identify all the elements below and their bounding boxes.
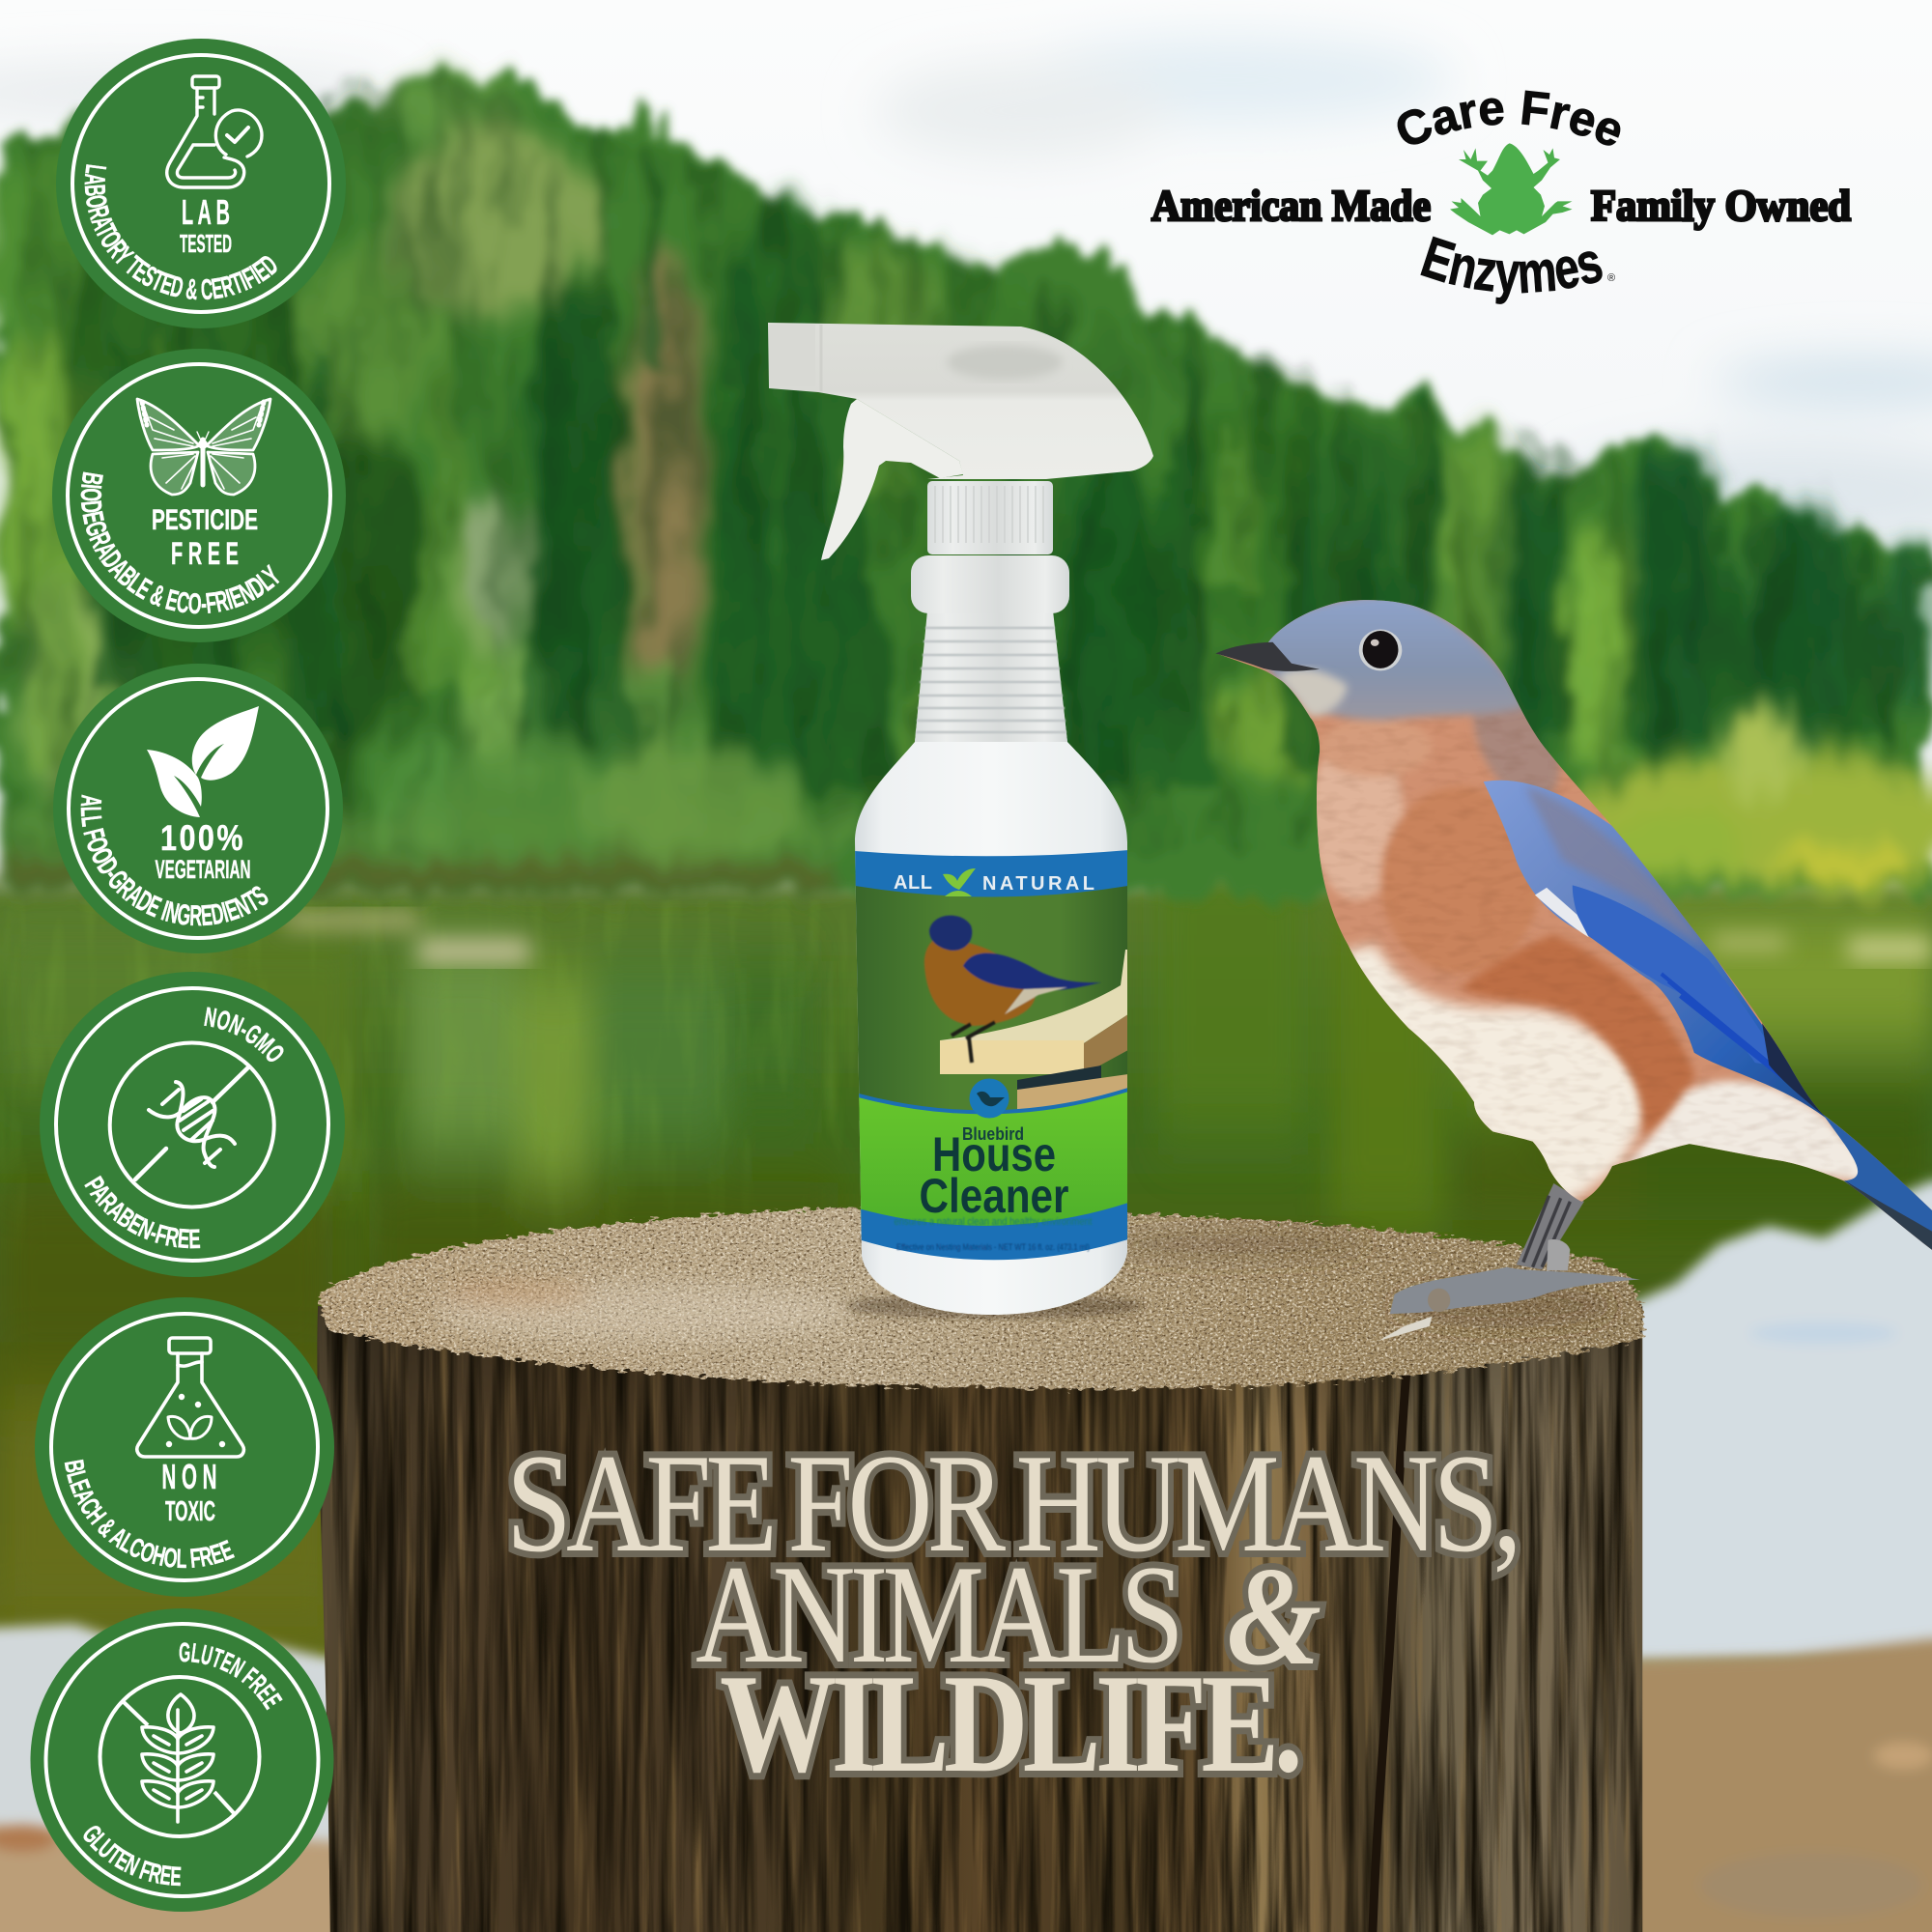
vegetarian text: VEGETARIAN (155, 855, 251, 884)
100% text: 100% (160, 818, 245, 858)
curved text: top: GLUTEN FREE (179, 1637, 288, 1714)
label bluebird photo (924, 916, 1101, 1063)
icon: wheat (142, 1694, 213, 1822)
tail (1823, 1115, 1932, 1269)
neck ribs (916, 628, 1066, 732)
undertail (1619, 1081, 1890, 1186)
curved text: paraben-free: PARABEN-FREE (84, 1175, 201, 1248)
bird body with soft plumage (1198, 580, 1932, 1269)
lake water (0, 838, 1932, 1669)
stump top tonal patches (431, 1227, 1614, 1342)
logo tagline right: Family Owned (1591, 181, 1851, 230)
bright water near shores (0, 1180, 1932, 1861)
label leaf mark (943, 868, 976, 896)
logo tagline left: American Made (1151, 181, 1431, 230)
lab text: L A B (182, 192, 230, 232)
bottom blue band (855, 1203, 1128, 1260)
sky (0, 0, 1932, 690)
curved text: LABORATORY TESTED & CERTIFIED (85, 164, 277, 299)
icon: flask with check (167, 76, 262, 187)
headline ampersand: & (1227, 1538, 1321, 1694)
headline line 1: SAFE FOR HUMANS, (506, 1425, 1517, 1581)
threaded neck (915, 611, 1067, 742)
non text: N O N (162, 1457, 216, 1496)
curved text: BIODEGRADABLE & ECO-FRIENDLY (81, 471, 280, 614)
icon: flask with leaf (137, 1338, 243, 1457)
breast shading (1310, 658, 1577, 974)
rufous flank (1460, 934, 1694, 1137)
small bird roundel (970, 1078, 1009, 1119)
sprayer trigger (821, 399, 963, 560)
bottle shadow on stump (845, 1293, 1145, 1319)
prohibition slash (124, 1702, 234, 1813)
all natural text (895, 875, 1094, 890)
headline line 3: WILDLIFE. (720, 1645, 1298, 1802)
icon: dna helix (149, 1082, 235, 1167)
headline line 2: ANIMALS (696, 1536, 1179, 1692)
blue wing (1484, 781, 1828, 1120)
bluebird text: Bluebird (962, 1124, 1024, 1144)
neck ring (911, 555, 1069, 613)
stump top surface (318, 1208, 1644, 1389)
registered mark: ® (1607, 272, 1615, 284)
house text: House (932, 1127, 1056, 1181)
feather texture (1198, 580, 1932, 1269)
tree stump (317, 1208, 1644, 1932)
ribbed cap collar (927, 481, 1053, 554)
eye (1359, 630, 1402, 670)
sprayer head (768, 323, 1153, 479)
blue top band (855, 850, 1128, 896)
badge: non toxic (35, 1297, 334, 1597)
forest hillside (0, 71, 1932, 894)
logo arc text: Enzymes: Enzymes (1420, 236, 1603, 304)
icon: two leaves (147, 706, 259, 817)
tagline: ensures a natural clean and healthy environment (895, 1216, 1092, 1228)
tested text: TESTED (180, 229, 232, 258)
cleaner text: Cleaner (920, 1169, 1068, 1223)
white belly (1334, 945, 1648, 1220)
curved text: ALL FOOD-GRADE INGREDIENTS (81, 794, 269, 925)
curved text: bottom: GLUTEN FREE (76, 1820, 183, 1891)
head (1254, 594, 1525, 720)
bluebird perched on stump (1198, 580, 1932, 1341)
logo frog (1450, 143, 1573, 235)
headline (506, 1425, 1517, 1802)
stump crack (1373, 1361, 1407, 1932)
sandy ground (0, 1638, 1932, 1932)
throat patch (1277, 669, 1348, 717)
leg and foot (1378, 1183, 1640, 1341)
product: spray bottle (768, 323, 1153, 1315)
curved text: BLEACH & ALCOHOL FREE (59, 1458, 238, 1574)
icon: butterfly (137, 399, 270, 495)
badge: gluten free (31, 1608, 334, 1912)
all natural text: ALL (894, 872, 932, 894)
bottle body (855, 618, 1127, 1315)
net weight line: Effective on Nesting Materials - NET WT 16 fl. oz. (473.1 ml) (896, 1242, 1090, 1252)
bright green panel (855, 1090, 1128, 1227)
stump bark (317, 1306, 1642, 1932)
logo: Care Free Enzymes (1151, 80, 1851, 305)
all natural text: NATURAL (982, 873, 1094, 895)
toxic text: TOXIC (165, 1496, 215, 1527)
label house roof and box (940, 950, 1128, 1121)
picture panel (855, 874, 1128, 1121)
base plumage (1198, 580, 1932, 1269)
curved text: non-gmo: NON-GMO (204, 1007, 284, 1062)
badge: lab tested (56, 39, 346, 328)
badge: non-gmo (40, 972, 345, 1277)
beak (1215, 642, 1320, 671)
free text: F R E E (171, 536, 239, 571)
water reflections (0, 838, 1932, 1627)
badge: 100% vegetarian (53, 664, 343, 953)
far shore band (0, 707, 1932, 891)
prohibition slash (135, 1067, 248, 1179)
pesticide text: PESTICIDE (152, 504, 258, 536)
product label (855, 850, 1128, 1260)
badge: pesticide free (52, 349, 346, 642)
logo arc text: Care Free: Care Free (1397, 91, 1621, 146)
